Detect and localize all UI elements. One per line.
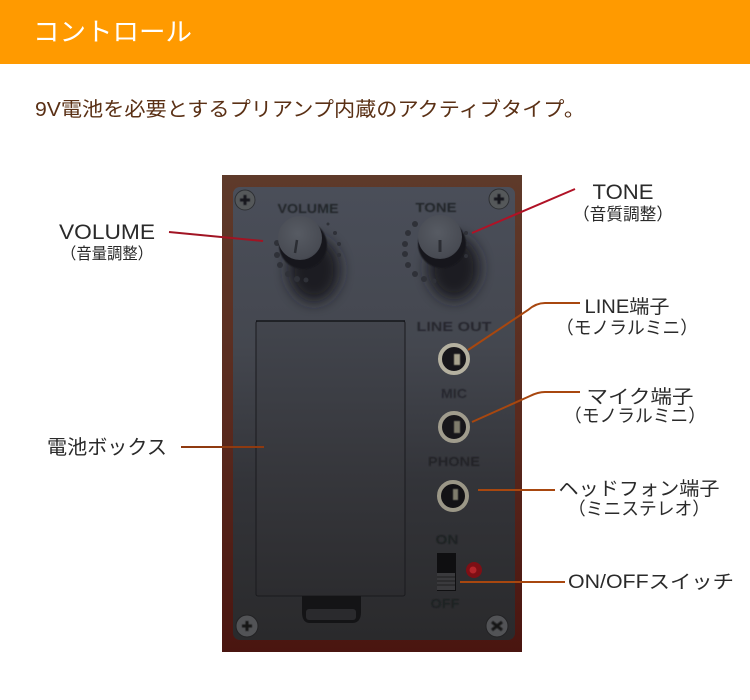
control panel photo [222, 175, 522, 652]
screws [235, 189, 509, 637]
line out jack [416, 319, 492, 373]
label: line out: LINE端子 [584, 296, 670, 318]
title: コントロール [33, 17, 192, 47]
wood cabinet [222, 175, 522, 652]
label: VOLUME: VOLUME [278, 201, 339, 216]
power switch: ON [436, 532, 458, 547]
mic jack: MIC [441, 386, 468, 401]
label: tone [573, 181, 673, 224]
battery compartment door [256, 321, 405, 623]
label: TONE: TONE [416, 200, 457, 215]
label: tone: （音質調整） [573, 205, 673, 224]
label: volume: VOLUME [59, 221, 155, 244]
switch leader [460, 581, 565, 583]
label: mic [564, 386, 706, 426]
label: mic: マイク端子 [586, 386, 694, 408]
power switch [430, 532, 482, 611]
label: volume: （音量調整） [61, 245, 153, 263]
line out leader [468, 303, 580, 350]
phone jack: PHONE [428, 454, 480, 469]
label: line out [556, 296, 698, 338]
volume leader [169, 232, 263, 241]
label: on/off switch: ON/OFFスイッチ [568, 572, 734, 593]
label: phone: （ミニステレオ） [568, 499, 710, 519]
description text: 9V電池を必要とするプリアンプ内蔵のアクティブタイプ。 [35, 97, 585, 121]
label: phone: ヘッドフォン端子 [558, 478, 720, 500]
panel plate [233, 187, 515, 640]
label: phone [558, 478, 720, 519]
leader lines [169, 189, 580, 582]
tone leader [472, 189, 575, 233]
mic jack [440, 386, 468, 441]
battery leader [181, 446, 264, 448]
power switch: OFF [430, 596, 460, 611]
label: line out: （モノラルミニ） [556, 318, 698, 338]
line out jack: LINE OUT [416, 319, 492, 334]
header banner [0, 0, 750, 64]
volume knob [274, 201, 341, 302]
door tab [302, 596, 361, 623]
label: volume [59, 221, 155, 263]
power LED [466, 562, 482, 578]
mic leader [472, 392, 580, 422]
phone leader [478, 489, 555, 491]
label: mic: （モノラルミニ） [564, 406, 706, 426]
label: tone: TONE [592, 181, 654, 204]
tone knob [402, 200, 480, 300]
phone jack [428, 454, 480, 510]
label: battery box: 電池ボックス [47, 436, 167, 459]
